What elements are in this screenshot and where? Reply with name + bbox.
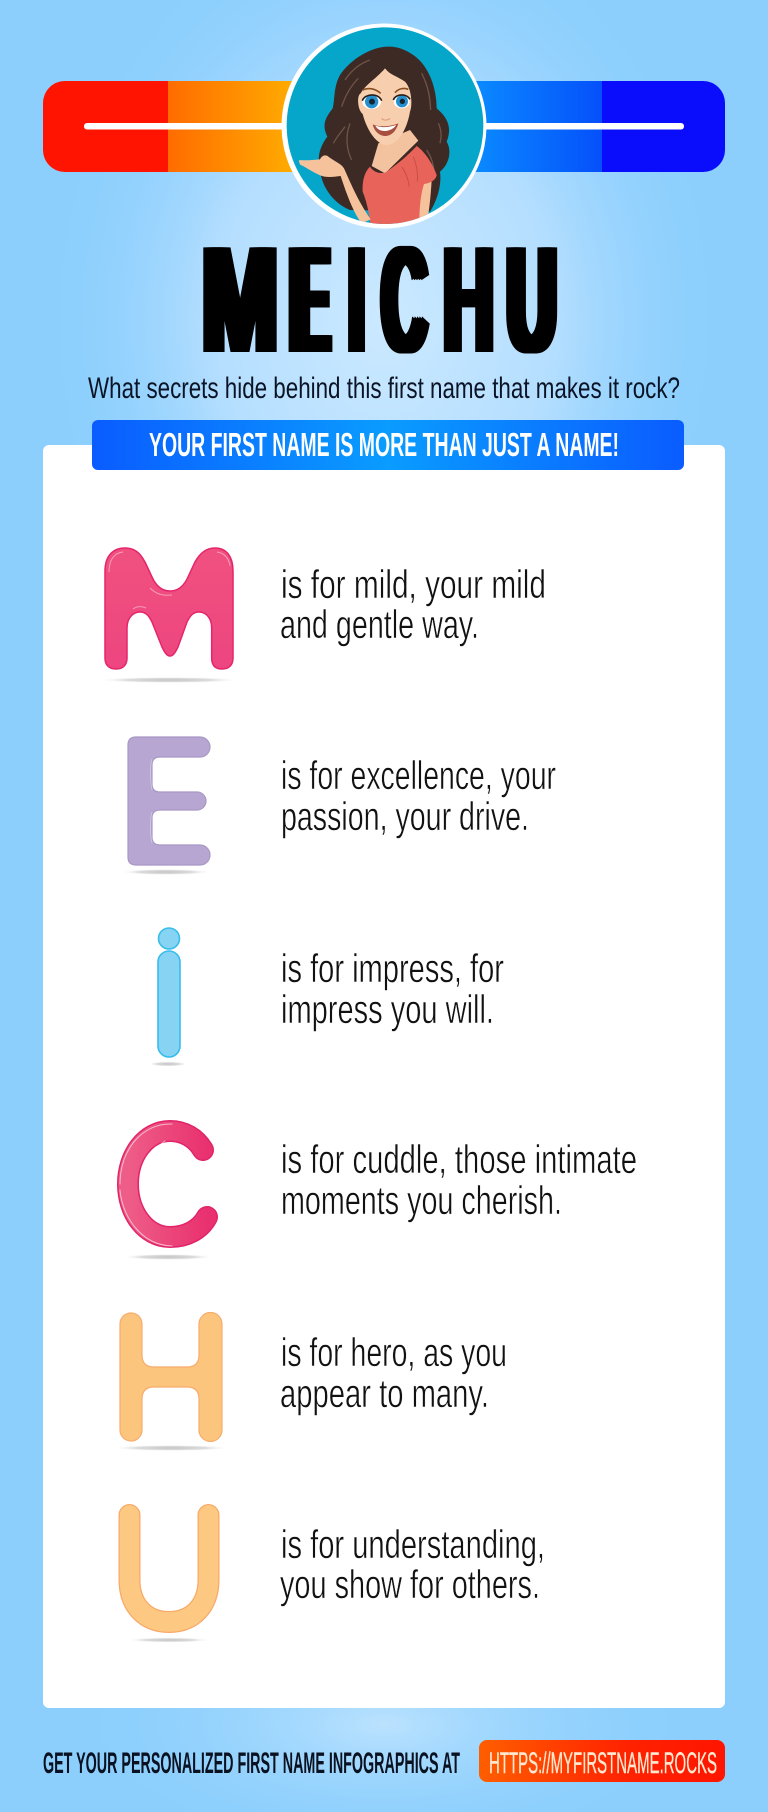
title: name: H [443,215,494,385]
letter E [128,737,210,865]
white content panel [43,445,725,1708]
shadow M [97,677,241,683]
text H: is for hero, as you [281,1331,507,1375]
portrait: woman in circle [282,24,486,228]
header ribbon [43,81,725,172]
text I: impress you will. [281,988,494,1032]
shadow I [148,1062,188,1066]
banner [92,420,684,470]
title: name: I [346,215,367,385]
letter I [158,928,180,1057]
letter U [130,1515,208,1622]
title: name [202,215,558,385]
text E: passion, your drive. [281,795,529,839]
far arm [416,182,432,219]
title: name: C [382,215,427,385]
shadow C [122,1254,214,1260]
text E: is for excellence, your [281,754,556,798]
neck [372,130,418,173]
letter H [120,1312,222,1442]
title: name: E [292,215,328,385]
text M: and gentle way. [280,603,479,647]
eyebrows [363,88,408,93]
letter row: I [148,928,504,1066]
text H [280,1331,507,1416]
shirt [363,146,437,227]
letter M [105,548,233,669]
letter row: M [97,548,546,683]
mouth [373,123,398,136]
letter C [120,1124,207,1246]
text M [280,563,546,647]
face [358,68,411,145]
text U: you show for others. [280,1563,540,1607]
footer url button [479,1740,725,1782]
text M: is for mild, your mild [281,563,546,607]
shadow E [120,869,212,875]
letter row: U [127,1515,545,1642]
hair [319,47,449,212]
near arm and hand [299,155,371,223]
title: name: U [507,215,557,385]
letter row: E [120,737,556,875]
shadow H [111,1445,231,1451]
text E [281,754,556,839]
text C: moments you cherish. [281,1179,562,1223]
letter row: C [120,1124,637,1260]
text I: is for impress, for [281,947,504,991]
text U: is for understanding, [281,1523,545,1567]
text C [281,1138,637,1223]
eyes [362,94,381,109]
title: name: M [202,215,278,385]
text H: appear to many. [280,1372,489,1416]
text U [280,1523,545,1607]
text I [281,947,504,1032]
shadow U [127,1638,211,1642]
letter row: H [111,1312,507,1451]
nose [382,118,390,120]
text C: is for cuddle, those intimate [281,1138,637,1182]
